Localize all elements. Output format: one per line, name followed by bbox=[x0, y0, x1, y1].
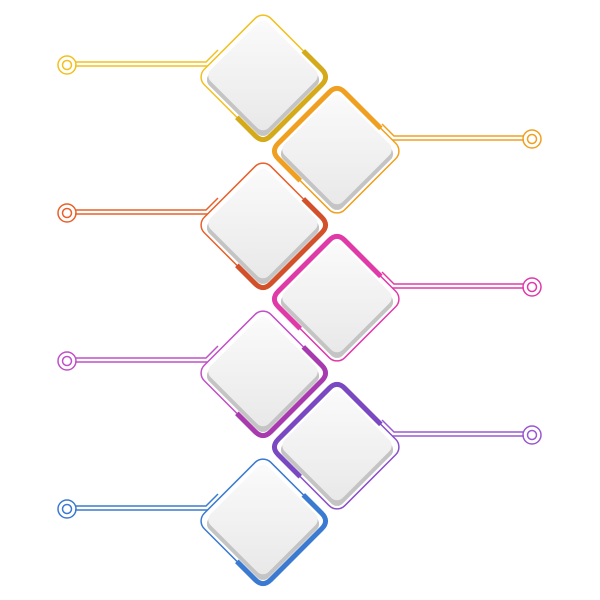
step 5: purple-pink (left) bbox=[58, 307, 329, 439]
step 1: yellow (left) bbox=[58, 11, 329, 143]
connector 3 bbox=[58, 198, 220, 222]
diamond 4 bbox=[271, 233, 403, 365]
step 3: red-orange (left) bbox=[58, 159, 329, 291]
diamond 6 bbox=[271, 381, 403, 513]
diamond 7 bbox=[197, 455, 329, 587]
step 2: orange (right) bbox=[271, 85, 541, 217]
connector 7 bbox=[58, 494, 220, 518]
step 4: magenta (right) bbox=[271, 233, 541, 365]
diamond 2 bbox=[271, 85, 403, 217]
connector 4 bbox=[380, 272, 541, 296]
connector 5 bbox=[58, 346, 220, 370]
step 6: violet (right) bbox=[271, 381, 541, 513]
connector 2 bbox=[380, 124, 541, 148]
step 7: blue (left) bbox=[58, 455, 329, 587]
connector 1 bbox=[58, 50, 220, 74]
diamond 3 bbox=[197, 159, 329, 291]
connector 6 bbox=[380, 420, 541, 444]
diamond 1 bbox=[197, 11, 329, 143]
diamond 5 bbox=[197, 307, 329, 439]
